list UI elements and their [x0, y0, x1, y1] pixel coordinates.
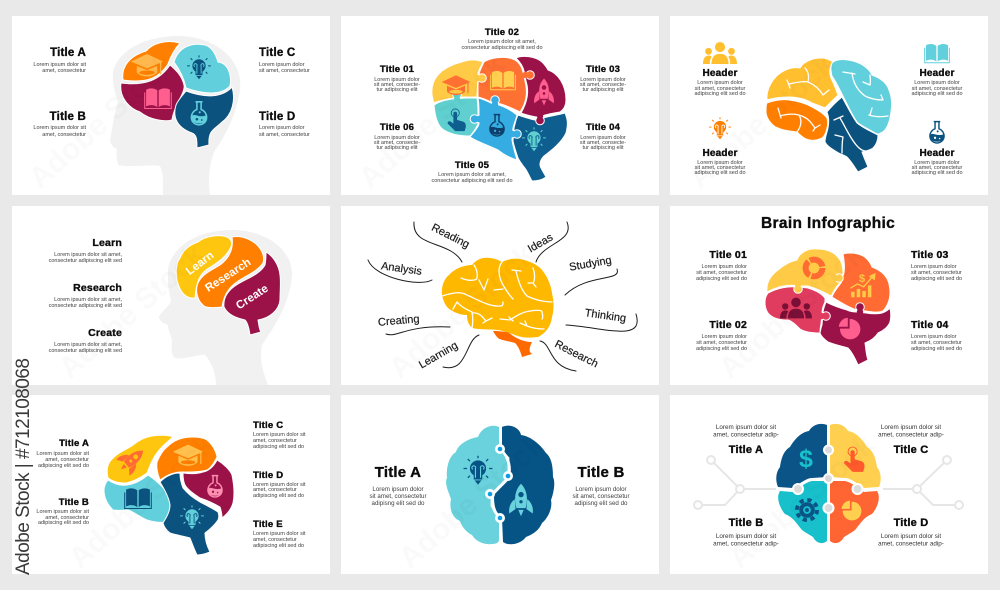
icon: growth chart	[850, 273, 876, 297]
text: Learn: consectetur adipiscing elit sed	[49, 258, 122, 264]
text: Title C: Lorem ipsum dolor sit	[253, 432, 306, 438]
text: Header bottom left	[694, 148, 746, 176]
text: Research: consectetur adipiscing elit sed	[49, 303, 122, 309]
text: Title 03: Lorem ipsum dolor	[911, 264, 957, 270]
text: Title 04: Title 04	[586, 122, 621, 133]
text: Title B	[572, 464, 630, 507]
text: Title E: Lorem ipsum dolor sit	[253, 531, 306, 537]
text: Create	[49, 327, 122, 354]
word: Learning	[417, 335, 479, 371]
text: Header top left: Lorem ipsum dolor	[697, 80, 743, 86]
text: Title A	[36, 438, 89, 469]
puzzle brain	[432, 56, 567, 181]
text: Title A: Lorem ipsum dolor	[372, 486, 424, 493]
text: Title C: sit amet, consectetur	[259, 68, 310, 74]
text: Header bottom right: sit amet, consectetur	[912, 165, 963, 171]
quadrant: bottom left	[778, 481, 827, 543]
text: Header top right: Lorem ipsum dolor	[914, 80, 960, 86]
text: Title 04: adipiscing elit sed do	[911, 346, 962, 352]
text: Research: Research	[73, 282, 122, 294]
text: Create: consectetur adipiscing elit sed	[49, 348, 122, 354]
icon: hand	[844, 447, 864, 472]
text: Title A: Title A	[59, 438, 89, 449]
word: Studying	[565, 254, 617, 295]
head silhouette	[159, 230, 292, 385]
text: Create: Lorem ipsum dolor sit amet,	[54, 342, 122, 348]
text: Title D: amet, consectetur adip-	[878, 540, 944, 548]
text: Header top right	[911, 68, 963, 97]
stock image id label: Adobe Stock | #712108068	[13, 358, 34, 575]
text: Title 06: Title 06	[380, 122, 414, 133]
text: Learn: Learn	[92, 237, 122, 249]
text: Title A: Title A	[50, 47, 86, 59]
text: Title 01: adipiscing elit sed do	[696, 276, 747, 282]
label: Create: Create	[234, 283, 271, 312]
text: Title B: Lorem ipsum dolor sit	[33, 125, 86, 131]
icon: flask	[191, 102, 207, 125]
text: Title A	[33, 47, 86, 74]
text: Title 03: Title 03	[911, 249, 949, 261]
text: Title D: Title D	[253, 470, 283, 481]
text: Title A: Title A	[375, 464, 421, 481]
text: Header bottom left: Lorem ipsum dolor	[697, 160, 743, 166]
quadrant: top right	[830, 424, 881, 488]
panel: four quadrant brain	[670, 395, 988, 574]
text: Header bottom right: Header	[919, 148, 955, 159]
icon: book	[125, 488, 151, 508]
text: Title C: Title C	[253, 420, 283, 431]
text: Title D	[259, 111, 310, 138]
word: Ideas	[526, 222, 568, 262]
text: Title C	[878, 424, 944, 456]
text: Title B: adipiscing elit sed do	[38, 520, 89, 526]
word: Learning: Learning	[417, 339, 460, 371]
text: Title 06: tur adipiscing elit	[377, 145, 418, 151]
icon: light bulb	[522, 127, 546, 151]
text: Title C	[259, 47, 310, 74]
text: Title 04: tur adipiscing elit	[583, 145, 624, 151]
watermark: Adobe Stock	[63, 428, 221, 575]
brain stem	[493, 331, 532, 357]
text: Title 05: consectetur adipiscing elit sed do	[431, 178, 513, 184]
icon: flask	[490, 115, 504, 136]
text: Title C: Title C	[259, 47, 295, 59]
word: Analysis: Analysis	[380, 260, 423, 278]
text: Title 03	[580, 64, 626, 93]
text: Title B: Lorem ipsum dolor sit	[716, 533, 776, 540]
text: Title 03: sit amet, consecte-	[580, 82, 626, 88]
text: Title A: adipisng elit sed do	[372, 500, 425, 507]
word: Thinking: Thinking	[584, 307, 627, 325]
text: Title B: Title B	[50, 111, 86, 123]
icon: cycle ring	[806, 260, 822, 276]
text: Header top left: Header	[702, 68, 738, 79]
puzzle tabs	[453, 71, 544, 138]
icon: book	[925, 44, 949, 63]
text: Title 06	[374, 122, 420, 151]
text: Learn: Lorem ipsum dolor sit amet,	[54, 252, 122, 258]
word: Analysis	[368, 260, 432, 282]
panel: brain infographic puzzle	[670, 206, 988, 385]
nodes	[793, 446, 862, 513]
text: Title 01: Title 01	[709, 249, 747, 261]
text: Title 01: Title 01	[380, 64, 415, 75]
text: Title 02	[696, 319, 747, 352]
circuit lines right	[883, 456, 963, 509]
text: Title A: amet, consectetur	[45, 457, 89, 463]
text: Title A: amet, consectetur	[42, 68, 86, 74]
watermark: Adobe Stock	[383, 238, 541, 385]
icon: people	[703, 42, 737, 64]
text: Title 05: Lorem ipsum dolor sit amet,	[438, 172, 506, 178]
text: Title 01: Lorem ipsum dolor	[701, 264, 747, 270]
quadrant: top left	[776, 424, 827, 488]
text: Title 01	[696, 249, 747, 282]
text: Title C: adipiscing elit sed do	[253, 444, 304, 450]
watermark: Adobe Stock	[353, 48, 511, 195]
text: Header top left: adipiscing elit sed do	[694, 91, 746, 97]
text: Title 06: sit amet, consecte-	[374, 140, 420, 146]
text: Title D	[253, 470, 306, 499]
brain body	[442, 258, 554, 338]
puzzle tabs	[794, 274, 864, 320]
icon: book	[145, 88, 171, 108]
text: Title B: Lorem ipsum dolor sit	[36, 509, 89, 515]
icon: light bulb	[464, 456, 492, 485]
text: Header top right: Header	[919, 68, 955, 79]
text: Title 02: Title 02	[485, 27, 519, 38]
brain bands	[176, 236, 280, 335]
text: Header top right: sit amet, consectetur	[912, 86, 963, 92]
text: Header top left	[694, 68, 746, 97]
text: Title 01: sit amet, consecte-	[374, 82, 420, 88]
text: Title 02: Title 02	[709, 319, 747, 331]
text: Title A	[713, 424, 779, 456]
text: Title 02: Lorem ipsum dolor	[701, 334, 747, 340]
anatomical brain	[766, 58, 892, 172]
label: Research: Research	[203, 256, 253, 295]
icon: hand	[448, 109, 466, 131]
brain lobes	[121, 42, 234, 148]
circuit lines left	[694, 456, 776, 509]
word: Ideas: Ideas	[526, 231, 556, 255]
panel: anatomical brain with headers	[670, 16, 988, 195]
icon: light bulb	[187, 55, 211, 79]
icon: book	[491, 71, 515, 90]
text: Title A: Lorem ipsum dolor sit	[33, 62, 86, 68]
text: Title C: amet, consectetur adip-	[878, 432, 944, 438]
text: Header top left: sit amet, consectetur	[695, 86, 746, 92]
text: Title 01: sit amet, consectetur	[696, 270, 747, 276]
text: Title A: Lorem ipsum dolor sit	[716, 424, 776, 431]
text: Title A: Title A	[729, 444, 763, 456]
text: Title C: amet, consectetur	[253, 438, 297, 444]
text: Title E	[253, 519, 306, 549]
text: Title D: sit amet, consectetur	[259, 132, 310, 138]
text: Title A: amet, consectetur adip-	[713, 432, 779, 438]
text: Title 03: Lorem ipsum dolor	[580, 77, 626, 83]
text: Title A	[369, 464, 427, 507]
text: Title 01: tur adipiscing elit	[377, 87, 418, 93]
text: Title 04: sit amet, consectetur	[911, 340, 962, 346]
text: Create: Create	[88, 327, 122, 339]
text: Title 02: sit amet, consectetur	[696, 340, 747, 346]
text: Title B: amet, consectetur adip-	[713, 540, 779, 548]
label: Learn: Learn	[184, 249, 216, 278]
text: Header bottom left: Header	[702, 148, 738, 159]
text: Title B: Title B	[59, 497, 89, 508]
text: Header bottom right: adipiscing elit sed do	[911, 170, 963, 176]
text: Title B	[33, 111, 86, 138]
text: Title B: amet, consectetur	[42, 132, 86, 138]
text: Title A: adipiscing elit sed do	[38, 463, 89, 469]
title: Brain Infographic	[761, 215, 895, 232]
icon: growth chart: $	[859, 273, 865, 285]
brain lobes	[104, 435, 234, 555]
icon: flask	[208, 476, 222, 497]
text: Title 03: tur adipiscing elit	[583, 87, 624, 93]
connector nodes	[485, 444, 513, 523]
panel: two hemisphere brain	[341, 395, 659, 574]
text: Learn	[49, 237, 122, 264]
panel: six piece puzzle brain	[341, 16, 659, 195]
watermark	[23, 48, 881, 575]
text: Title 03: adipiscing elit sed do	[911, 276, 962, 282]
text: Title D: Title D	[894, 517, 928, 529]
word: Research: Research	[553, 338, 600, 370]
text: Title 04: Lorem ipsum dolor	[580, 135, 626, 141]
icon: light bulb	[709, 117, 731, 139]
watermark: Adobe Stock	[683, 48, 841, 195]
text: Title 01	[374, 64, 420, 93]
icon: light bulb	[180, 505, 204, 529]
head silhouette	[110, 36, 240, 195]
panel: five lobe brain	[12, 395, 330, 574]
panel: head with four brain lobes	[12, 16, 330, 195]
text: Title 01: Lorem ipsum dolor	[374, 77, 420, 83]
text: Title 05	[431, 160, 513, 184]
icon: rocket	[509, 484, 533, 516]
text: Title C: Title C	[894, 444, 928, 456]
icon: rocket	[534, 78, 554, 106]
text: Title 05: Title 05	[455, 160, 490, 171]
text: Header top right: adipiscing elit sed do	[911, 91, 963, 97]
left hemisphere	[446, 426, 508, 544]
icon: pie chart	[842, 501, 861, 520]
text: Title 04	[911, 319, 962, 352]
text: Title D: Title D	[259, 111, 295, 123]
text: Title D: Lorem ipsum dolor	[259, 125, 305, 131]
text: Header bottom left: sit amet, consectetur	[695, 165, 746, 171]
text: Title B: Title B	[578, 464, 624, 481]
watermark: Adobe Stock	[23, 48, 181, 195]
text: Title B: amet, consectetur	[45, 515, 89, 521]
text: Title B: Lorem ipsum dolor	[575, 486, 627, 493]
watermark: Adobe Stock	[723, 428, 881, 575]
text: Research: Lorem ipsum dolor sit amet,	[54, 297, 122, 303]
text: Title B: sit amet, consectetur	[572, 493, 630, 500]
text: Title 03: sit amet, consectetur	[911, 270, 962, 276]
text: Title C: Lorem ipsum dolor	[259, 62, 305, 68]
watermark: Adobe Stock	[393, 428, 551, 575]
text: Title D: adipiscing elit sed do	[253, 493, 304, 499]
word: Thinking	[566, 307, 637, 331]
icon: graduation cap	[173, 445, 203, 466]
text: Title 02: Lorem ipsum dolor sit amet,	[468, 39, 536, 45]
text: Title 04: sit amet, consecte-	[580, 140, 626, 146]
text: Title 03	[911, 249, 962, 282]
text: Title B	[713, 517, 779, 548]
text: Title A: sit amet, consectetur	[369, 493, 427, 500]
right hemisphere	[494, 426, 554, 544]
puzzle brain	[765, 249, 891, 365]
quadrant: bottom right	[830, 481, 879, 543]
text: Title 02: adipiscing elit sed do	[696, 346, 747, 352]
text: Title 04: Title 04	[911, 319, 949, 331]
watermark: Adobe Stock	[53, 238, 211, 385]
text: Title 02	[461, 27, 543, 51]
text: Title A: Lorem ipsum dolor sit	[36, 451, 89, 457]
icon: rocket	[114, 443, 150, 477]
text: Title D: Lorem ipsum dolor sit	[881, 533, 941, 540]
icon: people	[780, 298, 812, 318]
text: Title B: Title B	[729, 517, 763, 529]
text: Title 03: Title 03	[586, 64, 620, 75]
text: Title D: amet, consectetur	[253, 487, 297, 493]
icon: graduation cap	[442, 75, 470, 95]
text: Title 04: Lorem ipsum dolor	[911, 334, 957, 340]
text: Title E: Title E	[253, 519, 283, 530]
word: Studying: Studying	[568, 254, 613, 274]
text: Title C: Lorem ipsum dolor sit	[881, 424, 941, 431]
text: Header bottom right	[911, 148, 963, 176]
word: Reading: Reading	[429, 222, 471, 251]
icon: pie chart	[839, 318, 860, 339]
icon: dollar sign: $	[799, 445, 813, 473]
word: Creating	[378, 313, 450, 335]
text: Research	[49, 282, 122, 309]
word: Creating: Creating	[378, 313, 420, 329]
text: Header bottom right: Lorem ipsum dolor	[914, 160, 960, 166]
text: Header bottom left: adipiscing elit sed do	[694, 170, 746, 176]
panel: yellow brain mind map	[341, 206, 659, 385]
word: Reading	[414, 222, 471, 262]
watermark: Adobe Stock	[713, 238, 871, 385]
text: Title 02: consectetur adipiscing elit sed do	[461, 45, 543, 51]
text: Title 04	[580, 122, 626, 151]
text: Title E: adipiscing elit sed do	[253, 543, 304, 549]
panel: head with learn research create	[12, 206, 330, 385]
icon: flask	[930, 122, 944, 143]
text: Title B: adipisng elit sed do	[575, 500, 628, 507]
text: Title E: amet, consectetur	[253, 537, 297, 543]
text: Title C	[253, 420, 306, 450]
text: Title B	[36, 497, 89, 526]
icon: gear	[797, 500, 817, 520]
text: Title D: Lorem ipsum dolor sit	[253, 482, 306, 488]
text: Title 06: Lorem ipsum dolor	[374, 135, 420, 141]
text: Title D	[878, 517, 944, 548]
icon: graduation cap	[131, 54, 163, 76]
